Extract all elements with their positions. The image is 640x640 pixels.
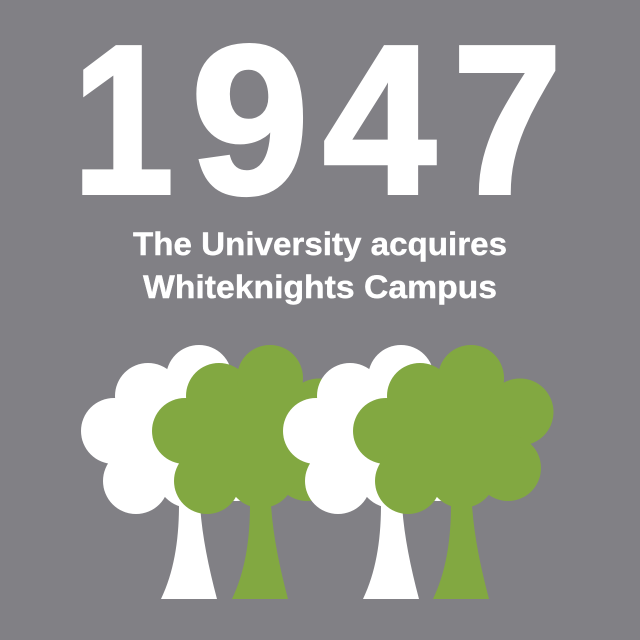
icon: green tree right (353, 345, 554, 599)
subtitle: Whiteknights Campus (143, 269, 497, 305)
year heading: 4 (323, 1, 436, 238)
year heading: 1 (72, 1, 174, 238)
subtitle (133, 226, 507, 305)
year heading: 7 (452, 2, 562, 239)
icon: white tree right (283, 345, 484, 599)
subtitle: The University acquires (133, 226, 507, 262)
year heading (72, 1, 562, 239)
icon: white tree left (81, 345, 282, 599)
illustration: trees (81, 345, 554, 599)
year heading: 9 (191, 1, 309, 238)
icon: green tree left (152, 345, 352, 599)
